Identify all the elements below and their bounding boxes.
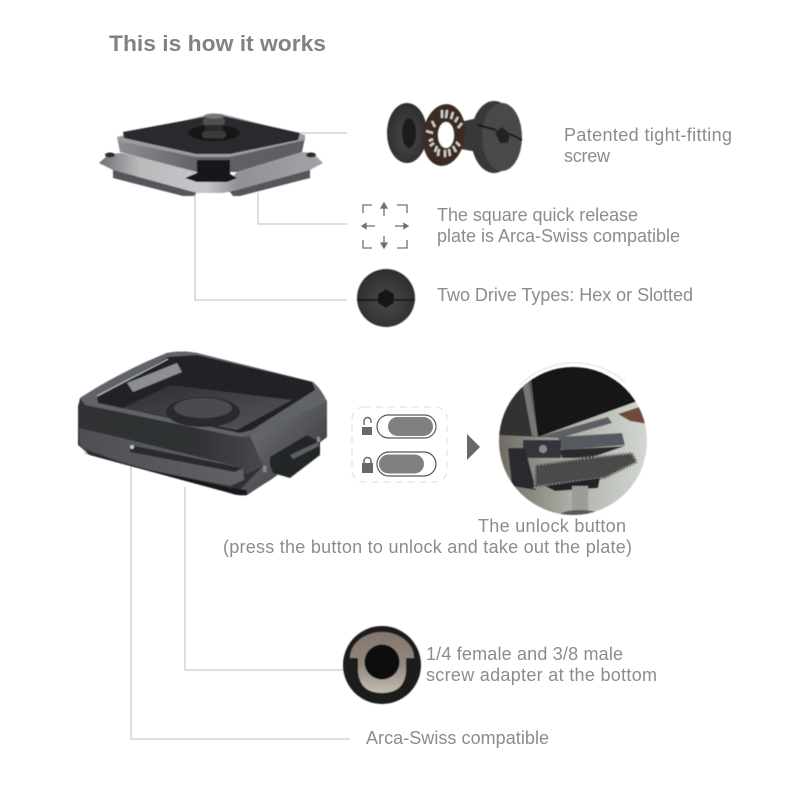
screw head (471, 101, 522, 173)
toggle: locked (377, 452, 436, 476)
photo: screw adapter bottom view (343, 626, 421, 704)
icon: closed padlock (362, 458, 373, 473)
text: screw adapter: screw adapter at the bottom (426, 665, 657, 685)
icon: open padlock (362, 418, 372, 435)
text: square plate: The square quick release (437, 205, 638, 225)
text: patented screw (564, 125, 732, 166)
icon: four-way arrows in corner brackets (362, 203, 408, 248)
leader line: square plate (258, 193, 347, 224)
text: screw adapter: 1/4 female and 3/8 male (426, 644, 623, 664)
unlock button (263, 435, 320, 478)
bearing ring (419, 101, 469, 169)
leader line: drive types (195, 193, 347, 300)
text: drive types: Two Drive Types: Hex or Slotted (437, 285, 693, 305)
text: patented screw: Patented tight-fitting (564, 125, 732, 145)
text: square plate: plate is Arca-Swiss compatible (437, 226, 680, 246)
text: Arca-Swiss compatible: Arca-Swiss compatible (366, 728, 549, 748)
text: unlock button (223, 516, 632, 557)
leader line: Arca-Swiss compatible (131, 447, 350, 739)
photo: unlocking plate on tripod head (498, 363, 650, 520)
quick release plate product image (99, 114, 323, 196)
leader line: tight-fitting screw (300, 132, 347, 134)
left washer (387, 103, 427, 163)
text: unlock button: The unlock button (478, 516, 626, 536)
text: unlock button: (press the button to unlock and take out the plate) (223, 537, 632, 557)
text: square plate (437, 205, 680, 246)
text: screw adapter (426, 644, 657, 685)
title: This is how it works (109, 31, 326, 56)
arrow (467, 434, 480, 460)
icon: hex and slotted drive (357, 269, 415, 327)
leader line: screw adapter (185, 487, 345, 670)
mounting screw (202, 114, 226, 139)
icon: exploded tight-fitting screw (387, 101, 522, 173)
panel: lock toggle switches (352, 407, 447, 482)
toggle: unlocked (377, 415, 436, 438)
screw shaft (455, 118, 478, 152)
base clamp product image (78, 352, 327, 495)
text: patented screw: screw (564, 146, 611, 166)
